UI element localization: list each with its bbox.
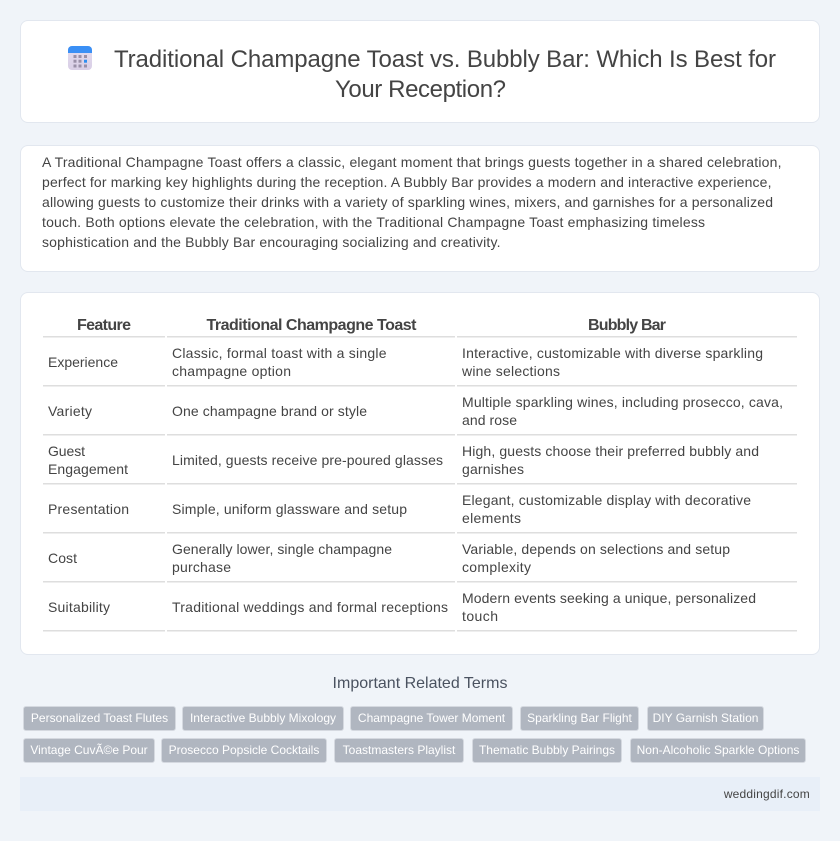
- row: presentation: [43, 492, 797, 534]
- title: [114, 46, 776, 103]
- row: presentation: Elegant, customizable display with decorative: [462, 492, 751, 508]
- tag: [334, 738, 464, 763]
- tag: [472, 738, 622, 763]
- tag: Non-Alcoholic Sparkle Options: [637, 743, 799, 757]
- row: variety: Multiple sparkling wines, including prosecco, cava,: [462, 394, 783, 410]
- row: experience: Classic, formal toast with a single: [172, 345, 387, 361]
- panel: header: [20, 20, 820, 123]
- footer bar: [20, 777, 820, 811]
- panel: comparison table: [20, 292, 820, 655]
- row: cost: Cost: [48, 550, 77, 566]
- row: experience: champagne option: [172, 363, 291, 379]
- row: suitability: Modern events seeking a unique, personalized: [462, 590, 756, 606]
- tag: Personalized Toast Flutes: [31, 711, 168, 725]
- row: guest engagement: garnishes: [462, 461, 524, 477]
- table header row: Traditional Champagne Toast: [206, 317, 417, 334]
- row: variety: One champagne brand or style: [172, 403, 367, 419]
- table header row: Bubbly Bar: [588, 317, 666, 334]
- row: variety: and rose: [462, 412, 517, 428]
- row: presentation: Presentation: [48, 501, 129, 517]
- row: variety: [43, 394, 797, 436]
- tag: Vintage CuvÃ©e Pour: [30, 743, 148, 757]
- heading: important related terms: Important Related Terms: [333, 675, 507, 692]
- row: suitability: touch: [462, 608, 498, 624]
- tag: Sparkling Bar Flight: [527, 711, 632, 725]
- icon: calendar: [68, 46, 92, 70]
- title: Your Reception?: [335, 76, 506, 103]
- row: cost: complexity: [462, 559, 531, 575]
- tag: [647, 706, 764, 731]
- intro paragraph: allowing guests to customize their drinks with a variety of sparkling wines, mixers, and garnishes for a personalized: [42, 194, 773, 210]
- tag: [350, 706, 513, 731]
- row: cost: purchase: [172, 559, 231, 575]
- footer source: weddingdif.com: [724, 787, 810, 801]
- row: presentation: Simple, uniform glassware and setup: [172, 501, 407, 517]
- row: guest engagement: High, guests choose their preferred bubbly and: [462, 443, 759, 459]
- intro paragraph: [42, 154, 782, 250]
- intro paragraph: A Traditional Champagne Toast offers a classic, elegant moment that brings guests together in a shared celebration,: [42, 154, 782, 170]
- tag: [520, 706, 639, 731]
- intro paragraph: touch. Both options elevate the celebration, with the Traditional Champagne Toast emphasizing timeless: [42, 214, 705, 230]
- intro paragraph: sophistication and the Bubbly Bar encouraging socializing and creativity.: [42, 234, 500, 250]
- row: experience: Experience: [48, 354, 118, 370]
- tag: Thematic Bubbly Pairings: [479, 743, 615, 757]
- row: variety: Variety: [48, 403, 92, 419]
- tag: Toastmasters Playlist: [343, 743, 455, 757]
- row: experience: [43, 345, 797, 386]
- tag: [182, 706, 344, 731]
- tag: Interactive Bubbly Mixology: [190, 711, 336, 725]
- row: experience: wine selections: [461, 363, 560, 379]
- tag: Prosecco Popsicle Cocktails: [169, 743, 319, 757]
- title: Traditional Champagne Toast vs. Bubbly Bar: Which Is Best for: [114, 46, 776, 73]
- row: guest engagement: [43, 443, 797, 484]
- row: guest engagement: Limited, guests receive pre-poured glasses: [172, 452, 443, 468]
- tag: [23, 706, 176, 731]
- tag: Champagne Tower Moment: [358, 711, 505, 725]
- row: guest engagement: Engagement: [48, 461, 128, 477]
- row: guest engagement: Guest: [48, 443, 85, 459]
- panel: intro text: [20, 145, 820, 272]
- row: presentation: elements: [462, 510, 521, 526]
- row: cost: Generally lower, single champagne: [172, 541, 392, 557]
- row: suitability: Suitability: [48, 599, 110, 615]
- row: suitability: [43, 590, 797, 632]
- tag: [161, 738, 327, 763]
- related term tags: [23, 706, 806, 763]
- row: suitability: Traditional weddings and formal receptions: [172, 599, 448, 615]
- table header row: Feature: [77, 317, 131, 334]
- intro paragraph: perfect for marking key highlights during the reception. A Bubbly Bar provides a modern and interactive experience,: [42, 174, 772, 190]
- row: cost: Variable, depends on selections and setup: [462, 541, 730, 557]
- row: experience: Interactive, customizable with diverse sparkling: [462, 345, 763, 361]
- tag: [23, 738, 155, 763]
- tag: [630, 738, 806, 763]
- tag: DIY Garnish Station: [653, 711, 758, 725]
- row: cost: [43, 541, 797, 582]
- table header row: [43, 317, 797, 338]
